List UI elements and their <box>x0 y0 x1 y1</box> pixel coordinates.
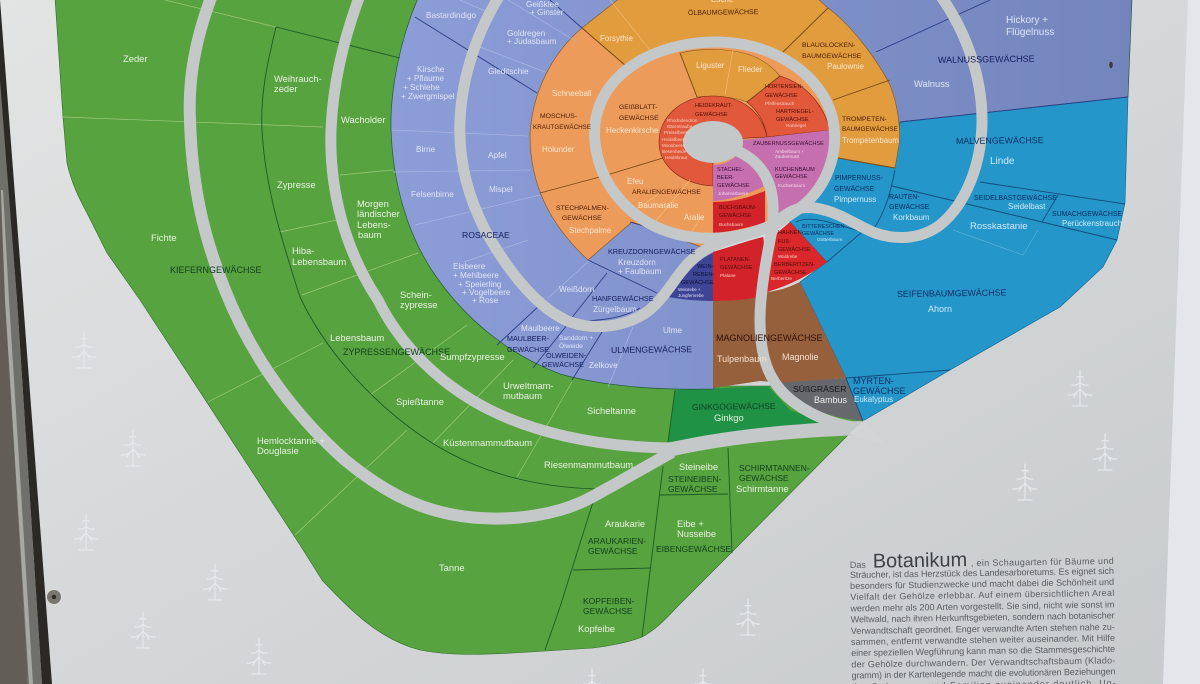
labels: pink and red families: Jungfernrebe <box>678 293 704 298</box>
labels: Kreuzdorn, Hanf, Maulbeer, Ölweiden, Ulmen: Sanddorn + <box>559 335 593 342</box>
labels: conifers: Morgen <box>357 198 389 209</box>
labels: blue families: Linde <box>990 156 1015 167</box>
labels: pink and red families: GEWÄCHSE <box>775 173 808 180</box>
labels: conifers: ZYPRESSENGEWÄCHSE <box>343 347 450 357</box>
labels: ginkgo and lower conifer families: Steineibe <box>679 461 718 472</box>
labels: Rosaceae: Birne <box>416 145 436 154</box>
labels: Rosaceae: + Judasbaum <box>507 37 557 46</box>
labels: pink and red families: STACHEL- <box>717 167 744 173</box>
labels: Kreuzdorn, Hanf, Maulbeer, Ölweiden, Ulmen: GEWÄCHSE <box>542 360 584 369</box>
region: blue Malven, Seifenbaum <box>790 97 1128 421</box>
labels: Kreuzdorn, Hanf, Maulbeer, Ölweiden, Ulmen: Zelkove <box>589 361 618 370</box>
path: inner ring <box>595 42 835 238</box>
labels: conifers: Lebensbaum <box>330 332 384 343</box>
text block: Botanikum description: einer speziellen Wegführung kann man so die Stammesgeschichte <box>851 644 1115 658</box>
labels: orange families: Schneeball <box>552 89 592 98</box>
labels: orange families: MOSCHUS- <box>540 113 577 120</box>
labels: orange families: BAUMGEWÄCHSE <box>802 52 862 60</box>
frame: black edge <box>0 0 52 684</box>
labels: brown and grey families: MAGNOLIENGEWÄCHSE <box>716 333 823 343</box>
panel patch trimming band ends along the diagonal <box>849 420 885 445</box>
labels: pink and red families: HAHNEN- <box>778 230 804 236</box>
labels: blue families: MALVENGEWÄCHSE <box>956 135 1044 146</box>
labels: Heidekraut, Hortensien, Hartriegel: HORTENSIEN- <box>765 84 804 90</box>
labels: Heidekraut, Hortensien, Hartriegel: Preiselbeere <box>664 130 690 135</box>
text block: Botanikum description: der Gehölze durchwandern. Der Verwandtschaftsbaum (Klado- <box>851 655 1115 669</box>
labels: conifers: zypresse <box>400 299 438 310</box>
labels: ginkgo and lower conifer families: Nusseibe <box>677 528 716 539</box>
labels: Kreuzdorn, Hanf, Maulbeer, Ölweiden, Ulmen: ÖLWEIDEN- <box>546 351 587 360</box>
labels: blue families: MYRTEN- <box>853 376 894 386</box>
labels: pink and red families: PLATANEN- <box>720 257 751 263</box>
labels: ginkgo and lower conifer families <box>578 401 810 634</box>
labels: blue families: GEWÄCHSE <box>889 203 930 211</box>
labels: ginkgo and lower conifer families: GEWÄCHSE <box>588 546 638 556</box>
labels: pink and red families: Weinrebe + <box>678 287 701 292</box>
frame: left post <box>0 60 28 684</box>
text block: Botanikum description: Das <box>850 560 866 570</box>
labels: conifers: zeder <box>274 83 297 94</box>
frame: rail highlight <box>1 190 33 684</box>
labels: Rosaceae: ROSACEAE <box>462 230 510 240</box>
text block: Botanikum description: Sträucher, ist das Herzstück des Landesarboretums. Es eignet sich <box>850 566 1114 580</box>
labels: pink and red families: Kuchenbaum <box>778 183 805 188</box>
labels: pink and red families: GEWÄCHSE <box>717 182 750 189</box>
labels: conifers: Weihrauch- <box>274 73 322 84</box>
labels: Kreuzdorn, Hanf, Maulbeer, Ölweiden, Ulmen: Maulbeere <box>521 324 560 333</box>
labels: Rosaceae: Felsenbirne <box>411 190 454 199</box>
labels: Rosaceae: Apfel <box>488 151 507 160</box>
labels: pink and red families: Platane <box>720 273 736 278</box>
labels: blue families: Eukalyptus <box>854 395 893 404</box>
labels: conifers: Lebensbaum <box>292 256 346 267</box>
central oval plaza <box>683 121 743 163</box>
labels: conifers: Urweltmam- <box>503 380 554 391</box>
labels: blue families <box>802 135 1122 404</box>
labels: Kreuzdorn, Hanf, Maulbeer, Ölweiden, Ulmen: Kreuzdorn <box>618 258 656 267</box>
labels: conifers: Hiba- <box>292 245 314 256</box>
labels: orange families: Aralie <box>684 213 705 222</box>
labels: pink and red families: ZAUBERNUSSGEWÄCHSE <box>753 140 824 147</box>
labels: conifers: Fichte <box>151 232 177 243</box>
labels: orange families: Stechpalme <box>569 226 612 235</box>
region: Hortensien and Hartriegel <box>747 76 830 137</box>
labels: ginkgo and lower conifer families: GEWÄCHSE <box>668 484 718 494</box>
labels: Rosaceae: + Pflaume <box>407 74 445 83</box>
labels: brown and grey families: Tulpenbaum <box>717 354 767 364</box>
labels: orange families: Forsythie <box>600 34 633 43</box>
region: periwinkle Rosaceae, Ulmen, Walnuss <box>391 0 1132 389</box>
labels: Rosaceae: + Schlehe <box>403 83 440 92</box>
labels: Rosaceae: Bastardindigo <box>426 11 477 20</box>
labels: Rosaceae: Weißdorn <box>559 285 595 294</box>
labels: Kreuzdorn, Hanf, Maulbeer, Ölweiden, Ulmen: HANFGEWÄCHSE <box>592 294 654 303</box>
labels: Heidekraut, Hortensien, Hartriegel: Heidelbeere <box>662 137 687 142</box>
labels: conifers: Douglasie <box>257 445 299 456</box>
labels: orange families: BAUMGEWÄCHSE <box>842 125 898 133</box>
region: Heidekraut <box>659 96 767 186</box>
labels: Heidekraut, Hortensien, Hartriegel <box>662 84 814 160</box>
labels: orange families: TROMPETEN- <box>842 116 887 123</box>
labels: Rosaceae: Kirsche <box>417 65 445 74</box>
region: Ölbaum, Blauglocken, Trompeten dark orange <box>582 0 900 168</box>
labels: brown and grey families: Bambus <box>814 395 848 405</box>
labels: Walnuss: Walnuss <box>914 78 950 89</box>
labels: Rosaceae: + Rose <box>472 296 499 305</box>
region: inner disc light orange <box>595 42 835 238</box>
path: right outer ring <box>772 0 982 238</box>
labels: conifers: Schein- <box>400 289 432 300</box>
labels: pink and red families: Waldrebe <box>778 254 798 259</box>
labels: conifers <box>123 53 636 573</box>
labels: blue families: Seidelbast <box>1008 202 1046 211</box>
labels: ginkgo and lower conifer families: Ginkgo <box>714 412 744 423</box>
labels: Kreuzdorn, Hanf, Maulbeer, Ölweiden, Ulmen: + Faulbaum <box>618 267 662 276</box>
labels: pink and red families: GEWÄCHSE <box>719 212 752 219</box>
labels: conifers: Spießtanne <box>396 396 444 407</box>
labels: Rosaceae: Goldregen <box>507 29 546 38</box>
labels: blue families: GEWÄCHSE <box>853 386 906 396</box>
labels: Heidekraut, Hortensien, Hartriegel: Rhododendron <box>667 118 698 123</box>
labels: orange families: Holunder <box>542 145 575 154</box>
labels: ginkgo and lower conifer families: Kopfeibe <box>578 623 615 634</box>
region: Wein dark purple <box>668 253 713 301</box>
labels: Heidekraut, Hortensien, Hartriegel: Bärentraube <box>667 124 693 129</box>
labels: orange families: Baumaralie <box>638 201 679 210</box>
text block: Botanikum description: , ein Schaugarten für Bäume und <box>971 556 1114 568</box>
labels: brown and grey families <box>716 333 848 405</box>
labels: pink and red families: GEWÄCHSE <box>778 246 811 253</box>
labels: conifers: KIEFERNGEWÄCHSE <box>170 265 262 275</box>
path: central spine <box>735 150 862 428</box>
labels: Rosaceae: Mispel <box>489 185 513 194</box>
labels: brown and grey families: Magnolie <box>782 352 819 362</box>
labels: blue families: Perückenstrauch <box>1062 219 1122 228</box>
labels: pink and red families <box>678 140 824 298</box>
labels: pink and red families: GEWÄCHSE <box>720 264 753 271</box>
labels: Rosaceae: Gleditschie <box>488 67 529 76</box>
labels: conifers: Hemlocktanne + <box>257 435 326 446</box>
text block: Botanikum description: gramm) in der Kartenlegende macht die evolutionären Beziehungen <box>851 666 1116 680</box>
labels: orange families: GEWÄCHSE <box>562 214 602 222</box>
labels: pink and red families: GEWÄCHSE <box>681 279 714 286</box>
labels: pink and red families: Berberitze <box>771 276 792 281</box>
labels: conifers: Sumpfzypresse <box>440 351 505 362</box>
labels: pink and red families: BERBERITZEN- <box>774 262 815 268</box>
labels: Rosaceae: Elsbeere <box>453 262 486 271</box>
labels: Kreuzdorn, Hanf, Maulbeer, Ölweiden, Ulmen: ULMENGEWÄCHSE <box>611 344 692 355</box>
region: Platanen <box>713 237 764 301</box>
labels: orange families: Efeu <box>627 177 643 186</box>
text block: Botanikum description: Verwandtschaft geordnet. Enger verwandte Arten stehen nahe zu- <box>851 622 1115 636</box>
labels: Walnuss: Flügelnuss <box>1006 27 1054 38</box>
labels: pink and red families: GEWÄCHSE <box>774 269 807 276</box>
labels: blue families: Ahorn <box>928 304 952 314</box>
labels: Heidekraut, Hortensien, Hartriegel: Pfeifenstrauch <box>765 101 795 106</box>
labels: Kreuzdorn, Hanf, Maulbeer, Ölweiden, Ulmen: GEWÄCHSE <box>507 345 549 354</box>
labels: pink and red families: Amberbaum + <box>775 149 804 154</box>
labels: Rosaceae: + Ginster <box>530 8 564 17</box>
labels: conifers: Zypresse <box>277 179 316 190</box>
labels: orange families: ARALIENGEWÄCHSE <box>632 188 701 196</box>
labels: conifers: Sicheltanne <box>587 405 636 416</box>
labels: brown and grey families: SÜßGRÄSER <box>793 384 846 394</box>
labels: Walnuss <box>914 15 1054 89</box>
labels: Kreuzdorn, Hanf, Maulbeer, Ölweiden, Ulmen: MAULBEER- <box>507 334 550 343</box>
labels: orange families: ÖLBAUMGEWÄCHSE <box>688 8 759 17</box>
labels: blue families: RAUTEN- <box>889 194 920 201</box>
labels: orange families: STECHPALMEN- <box>556 205 609 212</box>
labels: conifers: baum <box>358 229 382 240</box>
labels: conifers: Küstenmammutbaum <box>443 437 532 448</box>
labels: orange families: Heckenkirsche <box>606 126 659 135</box>
labels: Rosaceae: + Speierling <box>458 280 502 289</box>
labels: orange families: Paulownie <box>827 62 864 71</box>
labels: ginkgo and lower conifer families: KOPFEIBEN- <box>583 596 635 606</box>
labels: Kreuzdorn, Hanf, Maulbeer, Ölweiden, Ulmen: Ulme <box>663 326 683 335</box>
labels: blue families: Rosskastanie <box>970 221 1028 232</box>
labels: orange families: GEIßBLATT- <box>619 104 657 111</box>
labels: conifers: ländischer <box>357 208 400 219</box>
labels: ginkgo and lower conifer families: Araukarie <box>605 518 645 529</box>
labels: conifers: Zeder <box>123 53 148 64</box>
labels: Heidekraut, Hortensien, Hartriegel: HEIDEKRAUT- <box>695 103 733 109</box>
labels: Heidekraut, Hortensien, Hartriegel: GEWÄCHSE <box>765 92 798 99</box>
labels: pink and red families: WEIN- <box>697 264 714 270</box>
labels: pink and red families: BUCHSBAUM- <box>719 205 757 211</box>
labels: Heidekraut, Hortensien, Hartriegel: Moosbeere <box>662 143 685 148</box>
path: periwinkle ring <box>460 0 772 327</box>
labels: pink and red families: KUCHENBAUM <box>775 167 815 173</box>
region: brown Magnolien <box>713 282 846 388</box>
path: main entrance band <box>668 428 862 450</box>
labels: Walnuss: WALNUSSGEWÄCHSE <box>938 54 1035 65</box>
labels: ginkgo and lower conifer families: EIBENGEWÄCHSE <box>656 544 731 554</box>
labels: blue families: Götterbaum <box>817 237 842 243</box>
labels: ginkgo and lower conifer families: GEWÄCHSE <box>583 606 633 616</box>
labels: blue families: SEIDELBASTGEWÄCHSE <box>974 194 1057 202</box>
labels: ginkgo and lower conifer families: Schirmtanne <box>736 483 789 494</box>
labels: blue families: PIMPERNUSS- <box>835 175 883 182</box>
frame: metal rail <box>0 70 42 684</box>
labels: blue families: BITTERESCHEN- <box>802 224 846 230</box>
region: Buchsbaum <box>713 191 765 233</box>
labels: Heidekraut, Hortensien, Hartriegel: GEWÄCHSE <box>776 116 809 123</box>
text block: Botanikum description: besonders für Studienzwecke und macht dabei die Schönheit und <box>850 577 1114 591</box>
labels: pink and red families: Johannisbeere <box>718 191 749 196</box>
labels: conifers: Lebens- <box>357 219 391 230</box>
labels: Rosaceae <box>401 0 595 305</box>
labels: ginkgo and lower conifer families: GEWÄCHSE <box>739 473 789 483</box>
labels: pink and red families: FUß- <box>778 239 791 245</box>
labels: Kreuzdorn, Hanf, Maulbeer, Ölweiden, Ulmen <box>507 247 696 370</box>
labels: ginkgo and lower conifer families: SCHIRMTANNEN- <box>739 463 810 473</box>
labels: conifers: Wacholder <box>341 114 385 125</box>
labels: orange families: Trompetenbaum <box>842 136 899 145</box>
labels: blue families: Korkbaum <box>893 213 930 222</box>
labels: orange families: Flieder <box>738 65 763 74</box>
labels: Rosaceae: + Zwergmispel <box>401 92 455 101</box>
region: Zaubernuss and Kuchenbaum <box>743 130 830 216</box>
labels: pink and red families: REBEN- <box>693 272 714 278</box>
labels: blue families: GEWÄCHSE <box>802 230 834 237</box>
labels: Heidekraut, Hortensien, Hartriegel: HARTRIEGEL- <box>776 109 814 115</box>
region: Stachelbeer <box>713 155 763 201</box>
labels: blue families: SEIFENBAUMGEWÄCHSE <box>897 287 1007 299</box>
labels: Kreuzdorn, Hanf, Maulbeer, Ölweiden, Ulmen: KREUZDORNGEWÄCHSE <box>608 247 696 256</box>
labels: pink and red families: Zaubernuss <box>775 154 800 159</box>
labels: pink and red families: Buchsbaum <box>719 222 743 227</box>
text block: Botanikum description: werden mehr als 200 Arten vorgestellt. Sie sind, nicht wie sonst im <box>849 599 1115 614</box>
labels: Rosaceae: Geißklee <box>526 0 559 9</box>
labels: blue families: GEWÄCHSE <box>834 185 875 193</box>
region: Liguster and Flieder <box>680 49 780 102</box>
labels: ginkgo and lower conifer families: ARAUKARIEN- <box>588 536 646 546</box>
region: Moschuskraut orange <box>530 28 710 260</box>
labels: conifers: mutbaum <box>503 390 542 401</box>
labels: Kreuzdorn, Hanf, Maulbeer, Ölweiden, Ulmen: Zürgelbaum <box>593 305 637 314</box>
labels: orange families: KRAUTGEWÄCHSE <box>533 123 591 131</box>
labels: orange families: BLAUGLOCKEN- <box>802 42 855 49</box>
labels: blue families: Pimpernuss <box>834 195 876 204</box>
labels: orange families: GEWÄCHSE <box>619 114 659 122</box>
labels: Heidekraut, Hortensien, Hartriegel: Besenheide <box>662 149 687 154</box>
text block: Botanikum description <box>849 547 1116 684</box>
labels: conifers: Riesenmammutbaum <box>544 459 633 470</box>
tree icons, left <box>72 332 271 674</box>
path: middle conifer walkway <box>331 0 670 448</box>
labels: Rosaceae: + Vogelbeere <box>462 288 511 297</box>
labels: orange families: Liguster <box>696 61 725 70</box>
region: conifers green <box>55 0 863 654</box>
labels: ginkgo and lower conifer families: STEINEIBEN- <box>668 474 722 484</box>
path: outer conifer walkway <box>190 0 672 519</box>
labels: Heidekraut, Hortensien, Hartriegel: GEWÄCHSE <box>695 111 728 118</box>
text block: Botanikum description: Weltwald, nach ihren Herkunftsgebieten, sondern nach botanischer <box>851 610 1115 624</box>
screw <box>46 590 62 604</box>
tree icons, right and bottom <box>580 370 1117 684</box>
text block: Botanikum description: sammen, entfernt verwandte stehen weiter auseinander. Mit Hilfe <box>851 633 1115 647</box>
labels: pink and red families: BEER- <box>717 175 734 181</box>
labels: blue families: SUMACHGEWÄCHSE <box>1052 210 1122 218</box>
region: ginkgo <box>668 386 827 442</box>
labels: conifers: Tanne <box>439 562 465 573</box>
labels: Walnuss: Hickory + <box>1006 15 1048 26</box>
labels: Heidekraut, Hortensien, Hartriegel: Heidekraut <box>665 155 688 160</box>
labels: orange families <box>533 0 899 235</box>
text block: Botanikum description: Botanikum <box>873 549 967 573</box>
text block: Botanikum description: Vielfalt der Gehölze erlebbar. Auf einem übersichtlichen Areal <box>850 588 1114 602</box>
labels: ginkgo and lower conifer families: Eibe + <box>677 518 704 529</box>
labels: ginkgo and lower conifer families: GINKGOGEWÄCHSE <box>692 401 776 412</box>
labels: Heidekraut, Hortensien, Hartriegel: Hartriegel <box>786 123 806 128</box>
labels: Kreuzdorn, Hanf, Maulbeer, Ölweiden, Ulmen: Ölweide <box>559 342 583 350</box>
region: Hahnenfuß and Berberitzen <box>767 222 827 292</box>
labels: Rosaceae: + Mehlbeere <box>453 271 499 280</box>
region: Süßgräser grey <box>775 378 863 421</box>
speck on sign <box>1109 62 1113 68</box>
